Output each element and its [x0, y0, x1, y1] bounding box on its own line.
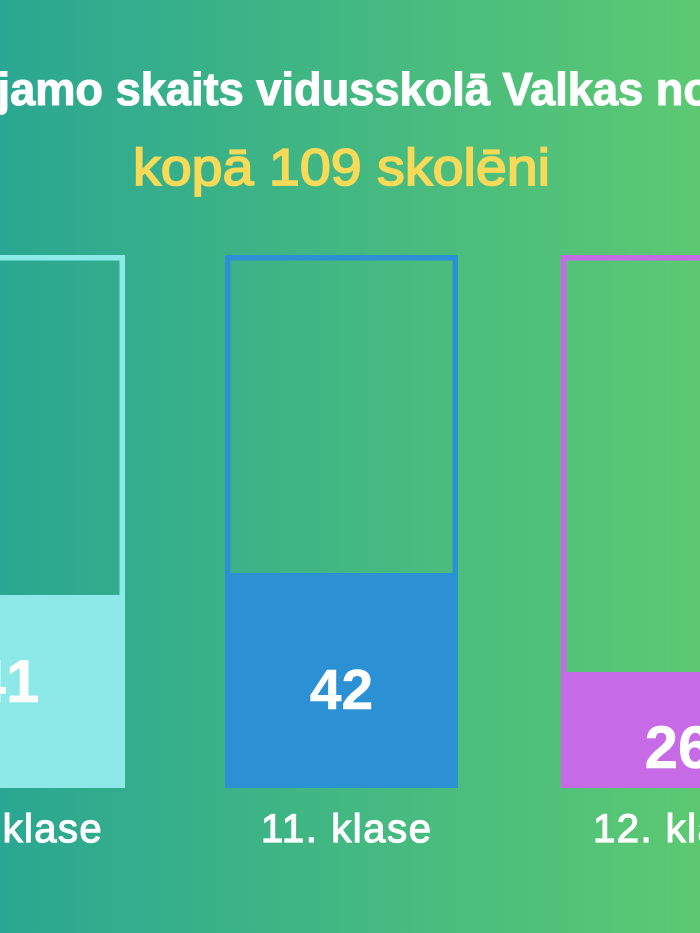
bar: 12. klase — [561, 258, 700, 851]
bar fill: 12. klase — [561, 672, 700, 788]
bar fill: 11. klase — [225, 573, 458, 788]
bar outline: 11. klase — [228, 258, 455, 578]
bar fill: 10. klase — [0, 596, 125, 788]
bar outline: 10. klase — [0, 258, 122, 598]
bar: 11. klase — [225, 258, 458, 851]
label: 11. klase: 11. klase — [261, 807, 431, 851]
bar outline: 12. klase — [564, 258, 700, 678]
bar: 10. klase — [0, 258, 125, 851]
subtitle: total students: kopā 109 skolēni — [133, 139, 550, 197]
value: 42: 42 — [310, 658, 373, 722]
